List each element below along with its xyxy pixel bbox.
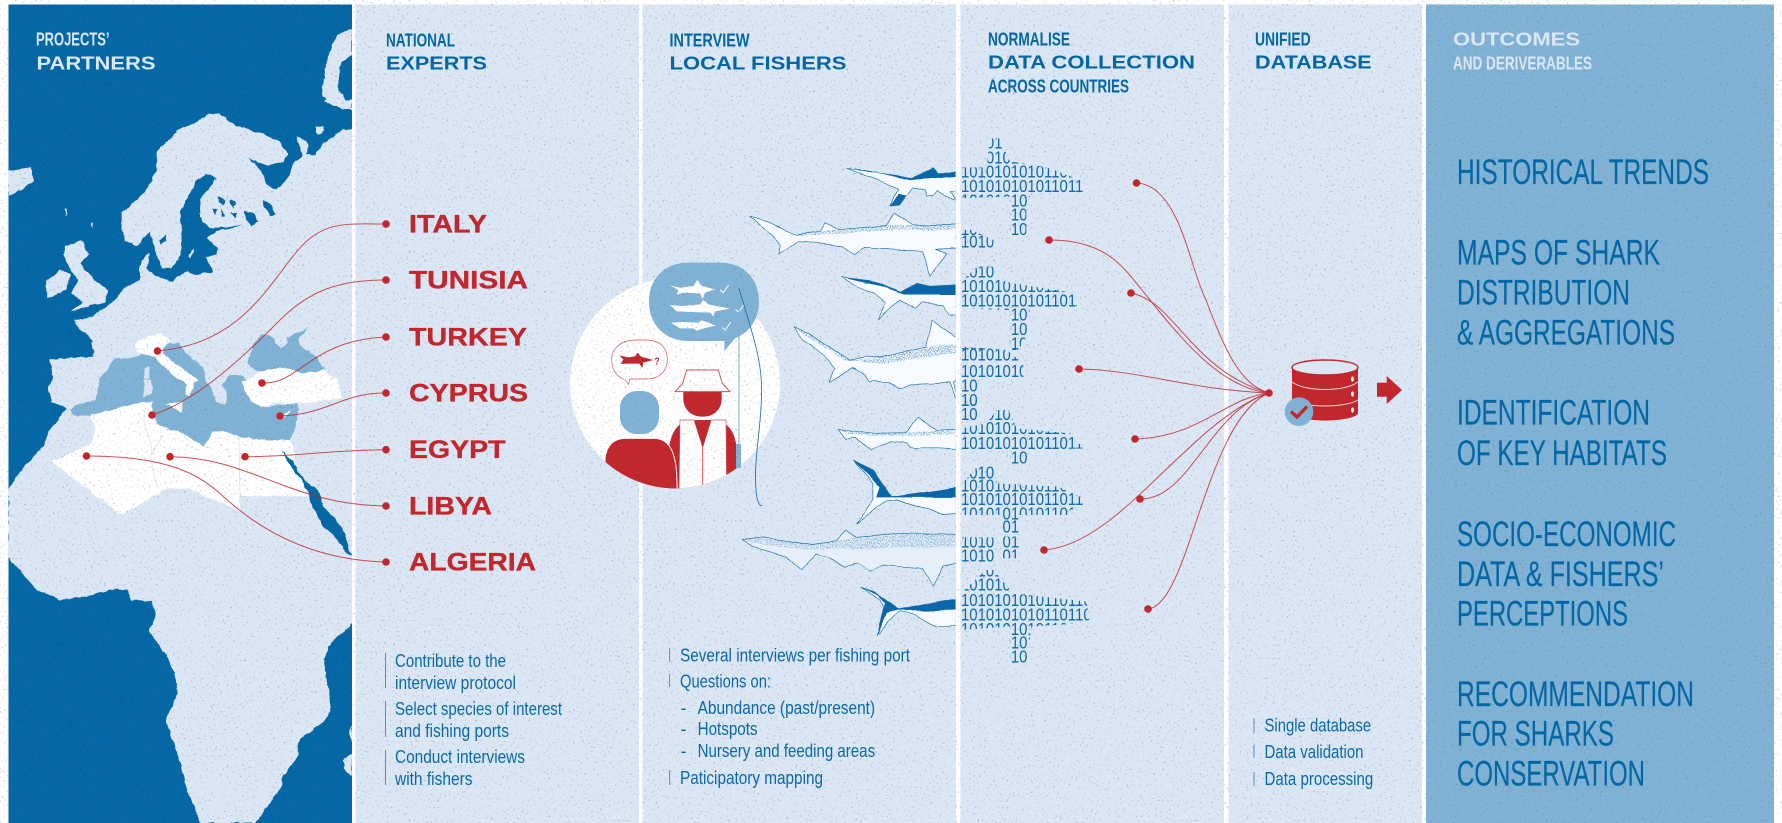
binary rows: 1010101010110110 <box>961 632 1092 652</box>
shark 5 <box>838 417 963 450</box>
interview bullet list: Nursery and feeding areas <box>698 741 875 761</box>
panel: projects' partners <box>8 4 352 823</box>
interview bullet list: Questions on: <box>680 671 771 691</box>
binary rows: 1010101010110110 <box>961 219 1092 239</box>
binary rows <box>962 138 1083 406</box>
binary rows <box>961 390 1092 667</box>
country list: TURKEY <box>409 324 527 352</box>
Mediterranean sea <box>70 343 298 447</box>
sharks top group <box>743 168 963 635</box>
heading: national experts <box>386 31 487 74</box>
outcomes list: IDENTIFICATION <box>1457 393 1650 432</box>
binary rows: 1010101010110110 <box>961 276 1092 296</box>
binary rows: 1010101010110110 <box>961 561 1092 581</box>
figures clipped to circle <box>605 420 737 493</box>
vest centre line <box>702 447 704 485</box>
database bullet list <box>1254 716 1373 789</box>
country list: EGYPT <box>409 436 506 464</box>
heading: normalise data collection: ACROSS COUNTRIES <box>988 77 1129 97</box>
fishing line <box>739 288 762 506</box>
binary rows: 1010101010110110 <box>961 433 1092 453</box>
Black Sea <box>247 328 325 374</box>
country list: CYPRUS <box>409 380 528 408</box>
shark 7 <box>743 530 963 586</box>
experts bullet list: and fishing ports <box>395 721 509 741</box>
country list: ALGERIA <box>409 548 536 576</box>
heading: normalise data collection <box>988 30 1195 97</box>
rod handle <box>736 444 741 468</box>
shark data dots <box>1040 179 1273 613</box>
outcomes list: MAPS OF SHARK <box>1457 233 1660 272</box>
binary rows: 1010101010110110 <box>961 575 1092 595</box>
binary rows: 1010101010110110 <box>961 476 1092 496</box>
outcomes list: FOR SHARKS <box>1457 715 1614 754</box>
blue speech bubble <box>649 263 759 351</box>
connector lines from map to countries <box>86 224 386 562</box>
binary rows: 1010101010110110 <box>961 447 1092 467</box>
experts bullet list <box>386 651 562 789</box>
binary rows: 1010101010110110 <box>961 147 1092 167</box>
heading: projects' partners: PARTNERS <box>36 54 156 74</box>
binary rows: 1010101010110110 <box>961 376 1092 396</box>
land: northern Europe and British Isles <box>47 100 360 342</box>
interview bullet list: - <box>680 698 686 718</box>
map and list dots <box>83 220 390 566</box>
Mediterranean islands <box>143 367 152 396</box>
interviewer body <box>605 438 677 493</box>
country list <box>409 210 536 576</box>
shark 6 <box>853 460 963 523</box>
outcomes list: CONSERVATION <box>1457 755 1645 794</box>
country borders and rivers <box>144 410 308 497</box>
binary rows: 1010101010110110 <box>961 546 1092 566</box>
binary rows: 1010101010110110 <box>961 404 1092 424</box>
shark 1 <box>847 168 963 206</box>
binary rows: 1010101010110110 <box>961 344 1092 364</box>
binary rows: 1010101010110110 <box>961 462 1092 482</box>
heading: national experts: EXPERTS <box>386 54 487 74</box>
shark 8 <box>860 587 963 635</box>
icon: database cylinder <box>1285 360 1358 426</box>
binary rows: 1010101010110110 <box>961 333 1092 353</box>
heading: interview local fishers <box>670 31 846 74</box>
panel: outcomes <box>1426 4 1774 823</box>
binary rows: 1010101010110110 <box>961 503 1092 523</box>
panel: normalise data collection <box>960 4 1224 823</box>
binary rows: 1010101010110110 <box>961 176 1092 196</box>
fisher collar <box>694 421 711 447</box>
land: Iberia and Mediterranean region <box>48 320 360 557</box>
heading: normalise data collection: NORMALISE <box>988 30 1070 50</box>
arrow to outcomes <box>1377 376 1402 404</box>
heading: unified database: UNIFIED <box>1255 30 1311 50</box>
Red Sea <box>281 449 353 557</box>
heading: projects' partners: PROJECTS’ <box>36 30 110 50</box>
fisher body <box>668 420 737 493</box>
interview bullet list: - <box>680 741 686 761</box>
map of Europe and Africa <box>9 28 360 823</box>
experts bullet list: Contribute to the <box>395 651 506 671</box>
binary rows: 1010101010110110 <box>961 418 1092 438</box>
heading: projects' partners <box>36 30 156 74</box>
experts bullet list: Select species of interest <box>395 699 562 719</box>
binary rows: 1010101010110110 <box>961 262 1092 282</box>
binary rows: 1010101010110110 <box>961 290 1092 310</box>
binary rows: 1010101010110110 <box>961 305 1092 325</box>
converging connector lines <box>1044 183 1269 609</box>
binary rows: 1010101010110110 <box>961 390 1092 410</box>
database bullet list: Single database <box>1264 716 1371 736</box>
interview bullet list <box>670 646 910 788</box>
shark 4 <box>794 320 956 399</box>
binary rows: 1010101010110110 <box>961 489 1092 509</box>
outcomes list: PERCEPTIONS <box>1457 595 1628 634</box>
binary rows: 1010101010110110 <box>961 190 1092 210</box>
binary rows: 1010101010110110 <box>961 231 1092 251</box>
panel: national experts <box>356 4 639 823</box>
panel: unified database <box>1228 4 1422 823</box>
interview bullet list: Several interviews per fishing port <box>680 646 910 666</box>
fisher interview scene <box>570 263 780 506</box>
outcomes list: & AGGREGATIONS <box>1457 313 1675 352</box>
interview bullet list: - <box>680 719 686 739</box>
database bullet list: Data processing <box>1264 769 1373 789</box>
database bullet list: Data validation <box>1264 742 1364 762</box>
interview bullet list: Hotspots <box>698 719 758 739</box>
binary rows: 1010101010110110 <box>961 133 1092 153</box>
binary rows: 1010101010110110 <box>961 531 1092 551</box>
outcomes list: SOCIO-ECONOMIC <box>1457 515 1676 554</box>
experts bullet list: interview protocol <box>395 673 516 693</box>
binary rows: 1010101010110110 <box>961 390 1092 410</box>
white circle <box>570 278 780 488</box>
outcomes list: OF KEY HABITATS <box>1457 434 1667 473</box>
outcomes list: DATA & FISHERS’ <box>1457 555 1664 594</box>
fisher hat <box>675 370 730 392</box>
interview bullet list: Abundance (past/present) <box>698 698 875 718</box>
partner countries in white <box>52 333 342 515</box>
binary rows: 1010101010110110 <box>961 319 1092 339</box>
shark 3 <box>842 277 963 320</box>
heading: unified database: DATABASE <box>1255 53 1372 73</box>
binary rows: 1010101010110110 <box>961 205 1092 225</box>
interview bullet list: Paticipatory mapping <box>680 768 823 788</box>
experts bullet list: with fishers <box>394 769 472 789</box>
heading: outcomes: OUTCOMES <box>1453 30 1580 50</box>
country list: LIBYA <box>409 492 492 520</box>
lakes and islands <box>160 197 275 244</box>
binary sharks top group <box>962 138 1083 406</box>
binary rows: 1010101010110110 <box>961 162 1092 182</box>
country list: TUNISIA <box>409 266 528 294</box>
heading: normalise data collection: DATA COLLECTION <box>988 53 1195 73</box>
heading: interview local fishers: INTERVIEW <box>670 31 750 51</box>
land: Arctic islands and Africa <box>9 28 359 823</box>
binary rows: 1010101010110110 <box>961 517 1092 537</box>
check marks <box>720 285 744 330</box>
binary rows: 1010101010110110 <box>961 590 1092 610</box>
country list: ITALY <box>409 210 487 238</box>
heading: outcomes <box>1453 30 1592 73</box>
shark 2 <box>748 213 963 277</box>
fisher head <box>683 392 722 417</box>
experts bullet list: Conduct interviews <box>395 747 525 767</box>
interviewer head <box>620 391 659 434</box>
binary rows: 1010101010110110 <box>961 605 1092 625</box>
panel: interview local fishers <box>642 4 956 823</box>
fisher vest <box>679 420 727 493</box>
question bubble <box>612 340 667 384</box>
Crimea <box>274 338 288 348</box>
binary rows: 1010101010110110 <box>961 647 1092 667</box>
question mark: ? <box>654 357 660 368</box>
binary sharks bottom group <box>961 390 1092 667</box>
heading: national experts: NATIONAL <box>386 31 455 51</box>
outcomes list <box>1457 153 1709 794</box>
white sharks in bubble <box>670 280 730 331</box>
heading: outcomes: AND DERIVERABLES <box>1453 53 1592 73</box>
binary rows: 1010101010110110 <box>961 361 1092 381</box>
red shark in bubble <box>619 353 653 368</box>
outcomes list: DISTRIBUTION <box>1457 273 1630 312</box>
binary rows: 1010101010110110 <box>961 619 1092 639</box>
heading: unified database <box>1255 30 1372 73</box>
heading: interview local fishers: LOCAL FISHERS <box>670 54 846 74</box>
fishing rod <box>737 288 740 467</box>
